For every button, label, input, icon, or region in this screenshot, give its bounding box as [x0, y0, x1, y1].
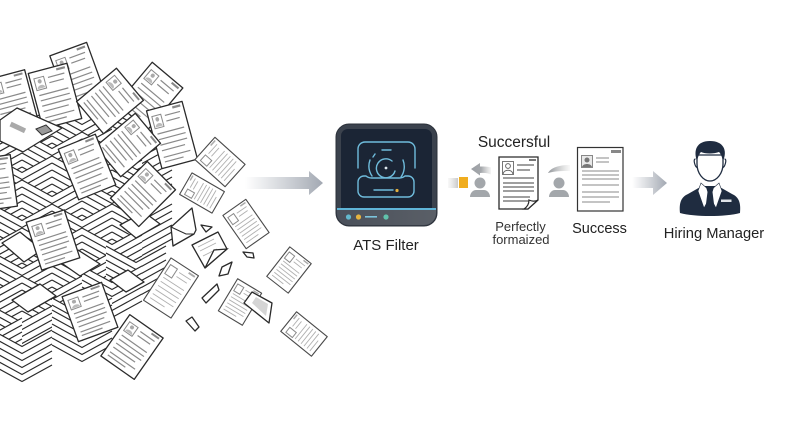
success resume [578, 148, 623, 211]
label: Hiring Manager: Hiring Manager [664, 226, 764, 242]
label: Perfectly formaized: Perfectly [495, 219, 546, 234]
hiring manager icon [680, 141, 740, 216]
scattered resumes and scraps [171, 137, 327, 356]
arrow to hiring manager [632, 171, 667, 195]
label: ATS Filter: ATS Filter [353, 237, 419, 254]
person icon right [549, 178, 569, 197]
loose white sheets in the stacks [2, 212, 160, 312]
curved return arrow [471, 163, 491, 176]
status lights [346, 214, 389, 220]
curved arrow right [548, 165, 570, 173]
label: Perfectly formaized [492, 219, 550, 247]
arrow to ATS filter [245, 171, 323, 195]
label: Success: Success [572, 221, 627, 237]
person icon left [470, 178, 490, 197]
paper stacks [0, 108, 172, 382]
scanner icon [358, 142, 415, 197]
title: Succersful: Succersful [478, 134, 550, 151]
formatted resume [499, 157, 538, 209]
resume pile [0, 42, 198, 381]
label: Perfectly formaized: formaized [492, 232, 550, 247]
ATS filter device [336, 124, 437, 226]
resume sheets on the pile [0, 42, 198, 379]
rejected squares [448, 177, 468, 188]
